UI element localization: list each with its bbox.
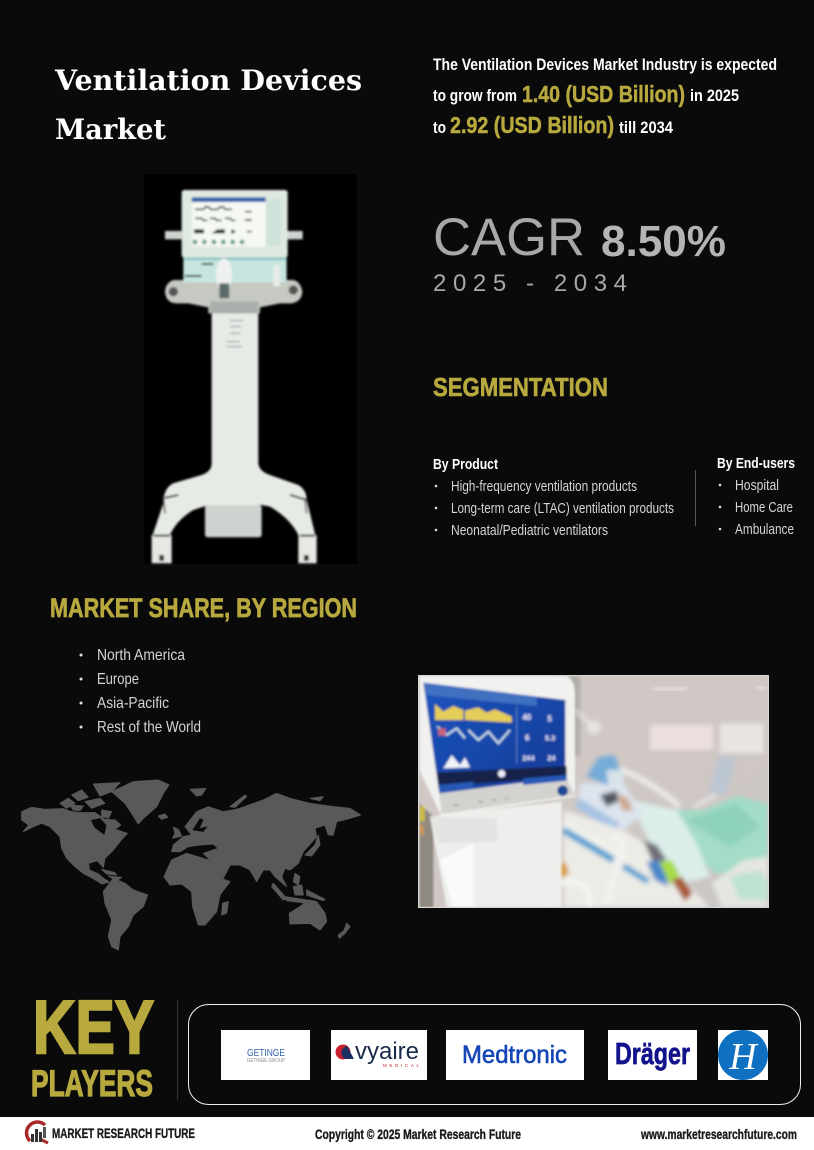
arm device [575, 710, 593, 727]
logo: Getinge: GETINGE GROUP [247, 1058, 286, 1064]
monitor body: 40 [522, 713, 532, 722]
monitor body: 244 [522, 754, 535, 763]
world map [22, 780, 361, 950]
region list: Rest of the World [97, 719, 201, 736]
title: Market [55, 113, 166, 146]
monitor body: 5.3 [545, 734, 555, 743]
Kamchatka and Japan [305, 822, 337, 856]
CAGR figure [433, 208, 726, 297]
Arctic islands [60, 783, 120, 818]
lower bed [563, 810, 710, 907]
monitor body: 6 [525, 734, 530, 743]
heading: market share by region: MARKET SHARE, BY REGION [50, 593, 357, 623]
Arctic Russia islands [230, 795, 323, 807]
monitor body: 24 [547, 754, 556, 763]
head [600, 791, 618, 807]
title: Ventilation Devices [54, 64, 362, 97]
monitor [165, 231, 182, 239]
segment list: by end-users: Hospital [735, 478, 779, 494]
monitor body: 5 [547, 715, 552, 724]
footer [0, 1117, 814, 1150]
image: ventilator on stand [144, 174, 357, 564]
Greenland [112, 780, 169, 824]
segment list: by end-users: Ambulance [735, 522, 794, 538]
segment list: by product [433, 456, 674, 539]
tubing [607, 837, 623, 903]
CAGR figure: 8.50% [601, 217, 726, 266]
logo: Medtronic: Medtronic [462, 1041, 567, 1069]
Madagascar [222, 902, 228, 915]
segment list: by end-users [717, 455, 795, 538]
segment list: by product: By Product [433, 456, 498, 473]
region list: North America [97, 647, 185, 664]
arm [643, 840, 667, 867]
monitor body [419, 676, 575, 907]
logo: Hamilton H: H [728, 1036, 759, 1078]
copyright: Copyright © 2025 Market Research Future [315, 1127, 521, 1142]
market forecast statement [433, 55, 777, 138]
Eurasia [172, 793, 361, 887]
segment list: by product: Long-term care (LTAC) ventilation products [451, 501, 674, 517]
Southeast Asia and Indonesia [272, 873, 325, 903]
market forecast statement: 1.40 (USD Billion) [522, 81, 685, 107]
curved bed rail [610, 765, 680, 807]
stand [153, 310, 315, 535]
CAGR figure: 2025 - 2034 [433, 270, 627, 297]
CAGR figure: CAGR [433, 208, 585, 267]
segment list: by end-users: Home Care [735, 500, 793, 516]
Baltic gap [193, 818, 207, 832]
region list: Europe [97, 671, 139, 688]
heading: key players: PLAYERS [31, 1063, 153, 1104]
lower housing [165, 280, 302, 313]
segment list: by end-users: By End-users [717, 455, 795, 472]
Iceland [158, 814, 168, 819]
heading: key players [31, 985, 154, 1104]
logo: Getinge [221, 1030, 310, 1080]
Hudson Bay [92, 819, 106, 834]
Caribbean [102, 869, 122, 881]
heading: key players: KEY [33, 985, 154, 1069]
Africa [164, 853, 230, 925]
region list [80, 647, 201, 736]
market forecast statement: to [433, 118, 446, 137]
region list: Asia-Pacific [97, 695, 169, 712]
logo: Vyaire Medical: vyaire [355, 1038, 419, 1065]
footer logo [27, 1122, 48, 1143]
green blanket [673, 796, 768, 873]
mask [587, 755, 623, 785]
gown [630, 800, 710, 883]
logo: Draeger: Dräger [615, 1036, 690, 1071]
South America [103, 878, 148, 950]
New Zealand [338, 923, 350, 938]
pillow [578, 783, 643, 830]
North America [22, 807, 127, 884]
logo: Vyaire Medical [331, 1030, 427, 1080]
logo: Vyaire Medical: MEDICAL [383, 1063, 419, 1068]
panel: key player logos [188, 1004, 800, 1104]
logo: Medtronic [446, 1030, 584, 1080]
title [54, 64, 362, 146]
lower right rail [712, 857, 768, 907]
logo: Draeger [608, 1030, 697, 1080]
logo: Getinge: GETINGE [247, 1048, 285, 1059]
market forecast statement: till 2034 [619, 118, 673, 137]
segment list: by product: Neonatal/Pediatric ventilators [451, 523, 608, 539]
logo: Hamilton H [718, 1030, 768, 1080]
IV stand [708, 757, 735, 798]
UK [173, 827, 182, 838]
footer brand name: MARKET RESEARCH FUTURE [52, 1126, 195, 1141]
photo: ventilator monitor beside hospital bed [418, 675, 769, 908]
heading: segmentation: SEGMENTATION [433, 372, 608, 402]
Svalbard [190, 788, 206, 796]
market forecast statement: 2.92 (USD Billion) [450, 112, 614, 138]
Australia [289, 900, 327, 930]
market forecast statement: to grow from [433, 86, 517, 105]
market forecast statement: in 2025 [690, 86, 739, 105]
segment list: by product: High-frequency ventilation products [451, 479, 637, 495]
